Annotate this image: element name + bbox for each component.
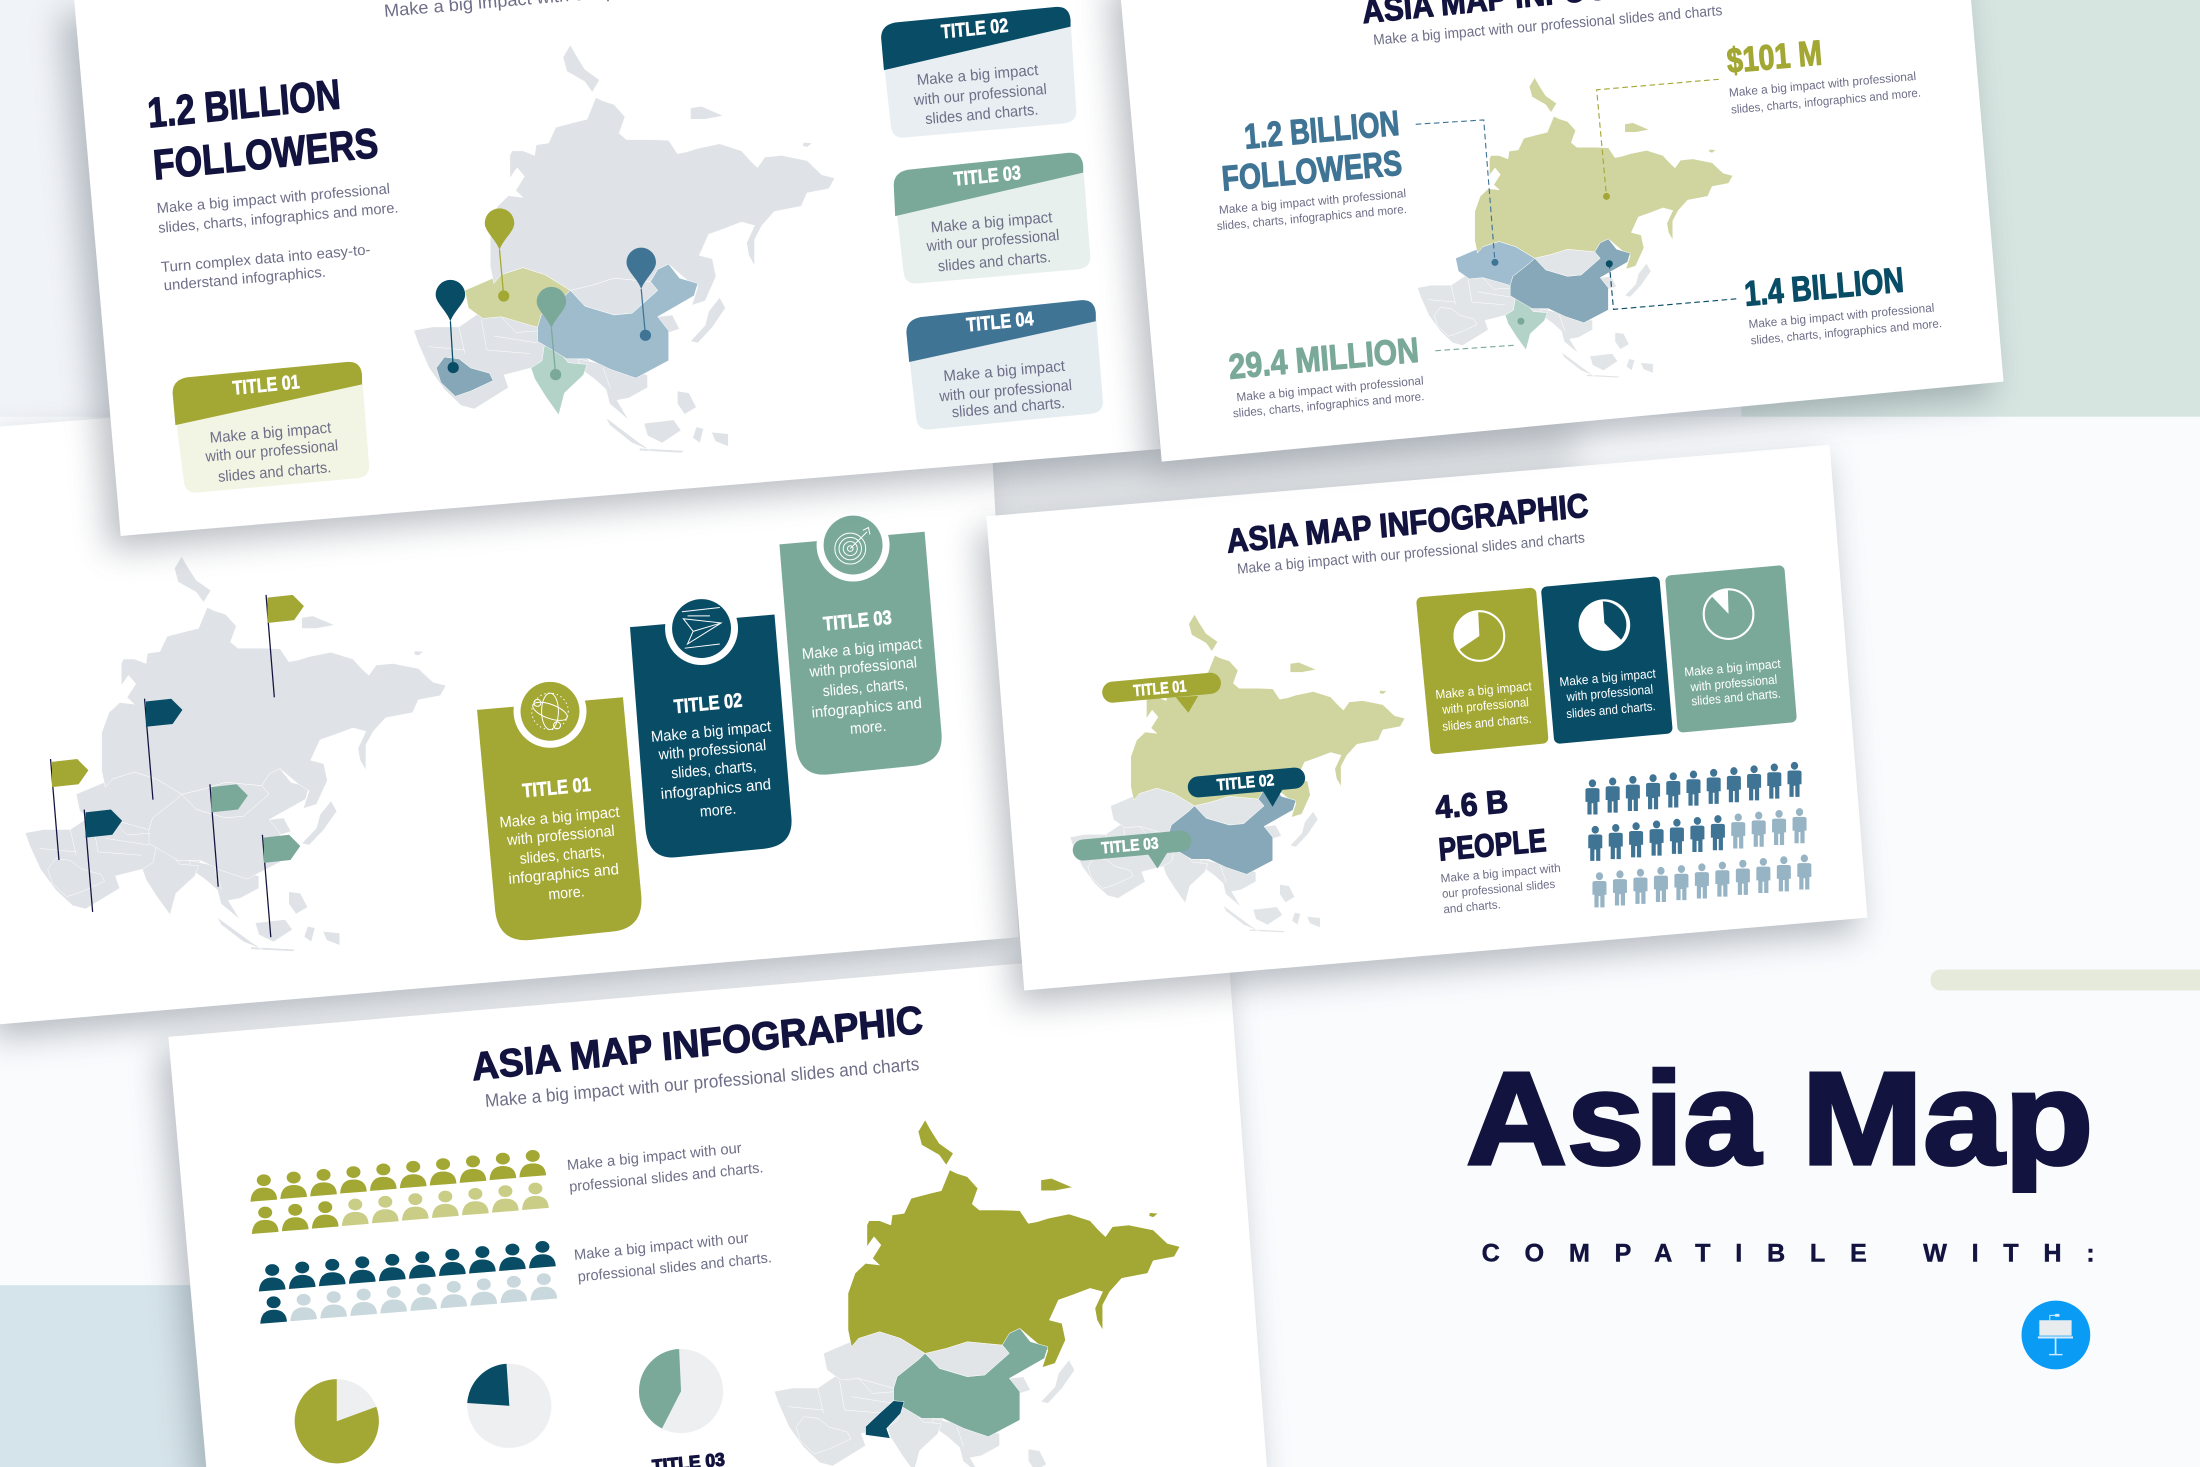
- headline: 1.2 billion followers: [146, 70, 380, 189]
- card: teal pie: slides and charts.: [1566, 699, 1656, 721]
- stat: $101 M: [1725, 33, 1921, 117]
- map: Asia with pins: [414, 45, 835, 453]
- card: title 02: infographics and: [660, 776, 772, 803]
- card: title 01: TITLE 01: [521, 774, 592, 803]
- flag markers: [51, 595, 304, 937]
- stat: 29.4 million: slides, charts, infographics and more.: [1232, 389, 1425, 420]
- map: Asia with Russia, Kazakhstan, China and India highlighted: [1417, 78, 1733, 378]
- leader lines: [1416, 79, 1736, 351]
- card: title 01: Make a big impact: [209, 420, 333, 447]
- text: olive pictogram caption: professional slides and charts.: [569, 1160, 764, 1196]
- card: title 04: [906, 300, 1103, 429]
- card: title 03: Make a big impact: [801, 635, 923, 663]
- headline: 4.6 B people: [1434, 783, 1548, 868]
- card: olive pie: Make a big impact: [1435, 679, 1533, 702]
- card: title 01: more.: [548, 883, 585, 904]
- stat: 1.4 billion: 1.4 BILLION: [1743, 260, 1905, 314]
- card: mint pie: Make a big impact: [1684, 657, 1782, 679]
- stat: 1.4 billion: [1743, 260, 1942, 347]
- headline: 1.2 billion followers: 1.2 BILLION: [146, 70, 342, 137]
- callout: title 03: [1072, 830, 1192, 868]
- card: title 01: [173, 362, 369, 493]
- pie chart: olive: [295, 1379, 379, 1463]
- card: title 02: with our professional: [912, 81, 1047, 109]
- text block: slides, charts, infographics and more.: [158, 200, 399, 237]
- text block: and charts.: [1443, 897, 1501, 916]
- stat: 1.4 billion: Make a big impact with professional: [1748, 301, 1935, 331]
- text: teal pictogram caption: professional slides and charts.: [577, 1250, 772, 1286]
- card: teal pie: with professional: [1565, 682, 1654, 704]
- title: Asia Map: Asia: [1466, 1045, 1763, 1192]
- headline: 1.2 billion followers: FOLLOWERS: [151, 119, 380, 189]
- map: Asia with Russia and China highlighted: [1070, 614, 1405, 933]
- stat: 1.2 billion followers: slides, charts, infographics and more.: [1216, 202, 1407, 233]
- card: olive pie: slides and charts.: [1442, 712, 1532, 734]
- subheading: Make a big impact with our professional slides and charts: [1237, 530, 1585, 578]
- card: title 02: [630, 592, 792, 857]
- subheading: Make a big impact with our professional slides and charts: [1373, 3, 1723, 49]
- card: olive pie: with professional: [1441, 695, 1529, 717]
- text block: [156, 181, 399, 294]
- card: teal pie: [1547, 582, 1667, 738]
- panel: slide with four statistics: [1108, 0, 2004, 476]
- card: title 02: [881, 7, 1076, 138]
- callout: title 02: TITLE 02: [1216, 771, 1275, 794]
- text block: [1440, 861, 1561, 916]
- card: title 03: [779, 509, 942, 775]
- card: title 03: with our professional: [925, 227, 1060, 255]
- panel: slide with map bubbles, pie cards and people: [978, 445, 1867, 1005]
- card: title 01: infographics and: [508, 861, 620, 888]
- card: title 04: TITLE 04: [966, 308, 1034, 337]
- card: title 02: slides and charts.: [925, 101, 1039, 128]
- pictogram: 33 people: [1585, 762, 1811, 907]
- subheading: Make a big impact with our professional slides and charts: [484, 1053, 920, 1111]
- callout: title 02: [1187, 767, 1306, 807]
- icon: globe: [530, 693, 570, 730]
- stat: $101 M: $101 M: [1725, 33, 1823, 81]
- pie chart: mint: [639, 1349, 723, 1433]
- card: mint pie: slides and charts.: [1691, 686, 1781, 709]
- panel: slide with pins and title cards: [62, 0, 1160, 550]
- headline: 4.6 B people: PEOPLE: [1437, 822, 1548, 868]
- card: title 03: Make a big impact: [930, 209, 1054, 236]
- card: title 01: slides, charts,: [519, 843, 606, 868]
- card: title 03: with professional: [808, 654, 918, 681]
- pictogram: olive people: [250, 1150, 549, 1234]
- card: mint pie: with professional: [1689, 673, 1778, 694]
- map pins: [436, 208, 656, 380]
- card: title 03: slides and charts.: [937, 249, 1052, 275]
- text: olive pictogram caption: Make a big impact with our: [566, 1141, 742, 1174]
- card: title 04: slides and charts.: [951, 395, 1066, 421]
- icon: target: [835, 528, 870, 564]
- card: title 01: Make a big impact: [499, 804, 621, 832]
- callout: title 01: [1101, 672, 1222, 713]
- leader dots: [1491, 193, 1613, 325]
- stat: $101 M: Make a big impact with professional: [1728, 69, 1917, 100]
- card: olive pie: [1422, 593, 1543, 749]
- text block: Make a big impact with: [1440, 861, 1561, 885]
- card: title 02: TITLE 02: [940, 15, 1009, 43]
- card: title 03: TITLE 03: [822, 607, 893, 636]
- stat: 1.2 billion followers: [1216, 104, 1407, 233]
- card: title 02: Make a big impact: [916, 62, 1040, 89]
- stat: 1.2 billion followers: 1.2 BILLION: [1243, 104, 1401, 157]
- icon: paper plane: [682, 608, 721, 648]
- card: title 04: with our professional: [938, 377, 1073, 405]
- card: title 03: more.: [849, 718, 887, 738]
- card: title 02: slides, charts,: [671, 758, 757, 782]
- card: title 02: more.: [699, 801, 737, 821]
- card: title 03: slides, charts,: [822, 676, 909, 700]
- pie chart: teal: [467, 1364, 551, 1448]
- heading: ASIA MAP INFOGRAPHIC: [470, 998, 924, 1089]
- subtitle: compatible with: COMPATIBLE WITH:: [1482, 1239, 2095, 1267]
- text block: our professional slides: [1441, 877, 1556, 901]
- stat: 1.4 billion: slides, charts, infographics and more.: [1750, 316, 1942, 347]
- icon: mint pie: [1704, 589, 1753, 639]
- headline: 4.6 B people: 4.6 B: [1434, 783, 1509, 826]
- icon: olive pie: [1454, 610, 1504, 661]
- card: title 03: infographics and: [811, 695, 923, 722]
- card: title 02: Make a big impact: [650, 718, 772, 746]
- text: teal pictogram caption: Make a big impact with our: [573, 1230, 749, 1264]
- callout: title 01: TITLE 01: [1133, 677, 1187, 700]
- card: title 02: TITLE 02: [673, 690, 743, 718]
- stat: 1.2 billion followers: Make a big impact with professional: [1218, 186, 1407, 217]
- stat: 1.2 billion followers: FOLLOWERS: [1220, 144, 1403, 199]
- callout: title 03: TITLE 03: [1101, 834, 1159, 858]
- icon: Keynote badge: [2022, 1301, 2090, 1369]
- stat: 29.4 million: Make a big impact with professional: [1236, 373, 1424, 404]
- card: title 01: TITLE 01: [232, 371, 301, 400]
- card: title 01: [477, 675, 641, 940]
- card: title 03: TITLE 03: [953, 162, 1022, 191]
- card: teal pie: Make a big impact: [1559, 666, 1657, 689]
- card: mint pie: [1671, 571, 1791, 727]
- card: title 01: with our professional: [204, 437, 339, 466]
- text: olive pictogram caption: [566, 1141, 764, 1196]
- card: title 01: with professional: [506, 823, 615, 849]
- card: title 01: slides and charts.: [217, 459, 332, 486]
- text: teal pictogram caption: [573, 1230, 772, 1286]
- stat: $101 M: slides, charts, infographics and more.: [1730, 85, 1921, 117]
- card: title 02: with professional: [657, 737, 767, 764]
- title: Asia Map: Map: [1802, 1045, 2093, 1192]
- text block: Turn complex data into easy-to-: [160, 242, 371, 276]
- map: Asia with Russia, China and Pakistan highlighted: [774, 1120, 1180, 1467]
- panel: slide with flags and numbered cards: [0, 348, 1019, 1038]
- card: title 04: Make a big impact: [943, 358, 1066, 385]
- stat: 29.4 million: 29.4 MILLION: [1227, 331, 1420, 387]
- card: title 03: [894, 153, 1090, 284]
- text block: Make a big impact with professional: [156, 181, 391, 217]
- text block: understand infographics.: [163, 265, 326, 294]
- title: Asia Map: [1466, 1045, 2093, 1192]
- panel: slide with people icons, pies and highlighted map: [160, 946, 1267, 1467]
- map: Asia with flags: [25, 556, 446, 951]
- pictogram: teal people: [259, 1241, 557, 1324]
- heading: ASIA MAP INFOGRAPHIC: [1225, 487, 1590, 561]
- stat: 29.4 million: [1227, 331, 1425, 420]
- icon: teal pie: [1579, 599, 1630, 651]
